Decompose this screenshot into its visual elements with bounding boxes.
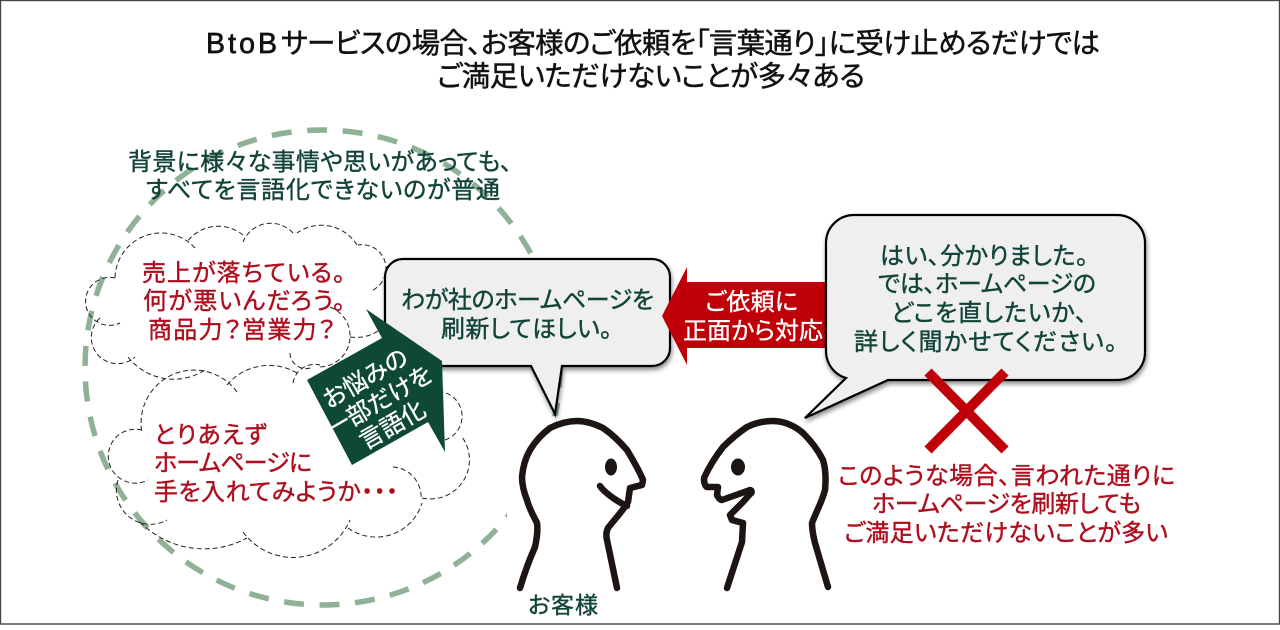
title: BtoB: [206, 28, 277, 60]
red arrow: respond head-on: ご依頼に: [705, 289, 798, 316]
provider speech bubble: 詳しく聞かせてください。: [854, 329, 1117, 356]
thought cloud: try the homepage: とりあえず: [154, 422, 267, 449]
warning text: このような場合、言われた通りに: [838, 463, 1175, 490]
provider speech bubble: では、ホームページの: [878, 271, 1096, 298]
thought cloud: try the homepage: [108, 364, 469, 557]
dashed green circle: [85, 130, 560, 605]
title: サービスの場合、お客様のご依頼を「言葉通り」に受け止めるだけでは: [281, 28, 1100, 60]
green arrow: verbalize part of worries: 言語化: [355, 396, 431, 456]
green arrow: verbalize part of worries: 一部だけを: [321, 361, 437, 444]
title: [206, 28, 1100, 93]
warning text: ホームページを刷新しても: [872, 491, 1141, 518]
thought cloud: sales worries: 何が悪いんだろう。: [143, 288, 345, 315]
customer speech bubble: 刷新してほしい。: [441, 316, 612, 343]
warning text: [838, 463, 1175, 547]
provider speech bubble: はい、分かりました。: [880, 243, 1088, 270]
thought cloud: sales worries: 売上が落ちている。: [142, 260, 345, 287]
customer figure: [520, 421, 643, 588]
thought cloud: sales worries: 商品力？営業力？: [148, 317, 335, 344]
provider speech bubble: どこを直したいか、: [891, 300, 1087, 327]
customer label: お客様: [528, 592, 598, 618]
provider speech bubble: [805, 215, 1145, 418]
provider figure: [704, 421, 828, 588]
icon: red cross: [928, 372, 1005, 450]
customer speech bubble: わが社のホームページを: [401, 287, 654, 314]
thought cloud: try the homepage: ホームページに: [154, 450, 312, 477]
circle caption: 背景に様々な事情や思いがあっても、: [128, 149, 512, 176]
warning text: ご満足いただけないことが多い: [844, 520, 1168, 547]
customer speech bubble: [385, 259, 670, 414]
circle caption: [128, 149, 512, 204]
thought cloud: sales worries: [86, 223, 386, 379]
red arrow: respond head-on: [662, 267, 830, 365]
green arrow: verbalize part of worries: お悩みの: [318, 344, 413, 414]
thought cloud: try the homepage: 手を入れてみようか・・・: [154, 479, 398, 506]
red arrow: respond head-on: 正面から対応: [683, 318, 823, 345]
circle caption: すべてを言語化できないのが普通: [146, 177, 500, 204]
title: ご満足いただけないことが多々ある: [437, 61, 865, 93]
green arrow: verbalize part of worries: [307, 309, 451, 467]
